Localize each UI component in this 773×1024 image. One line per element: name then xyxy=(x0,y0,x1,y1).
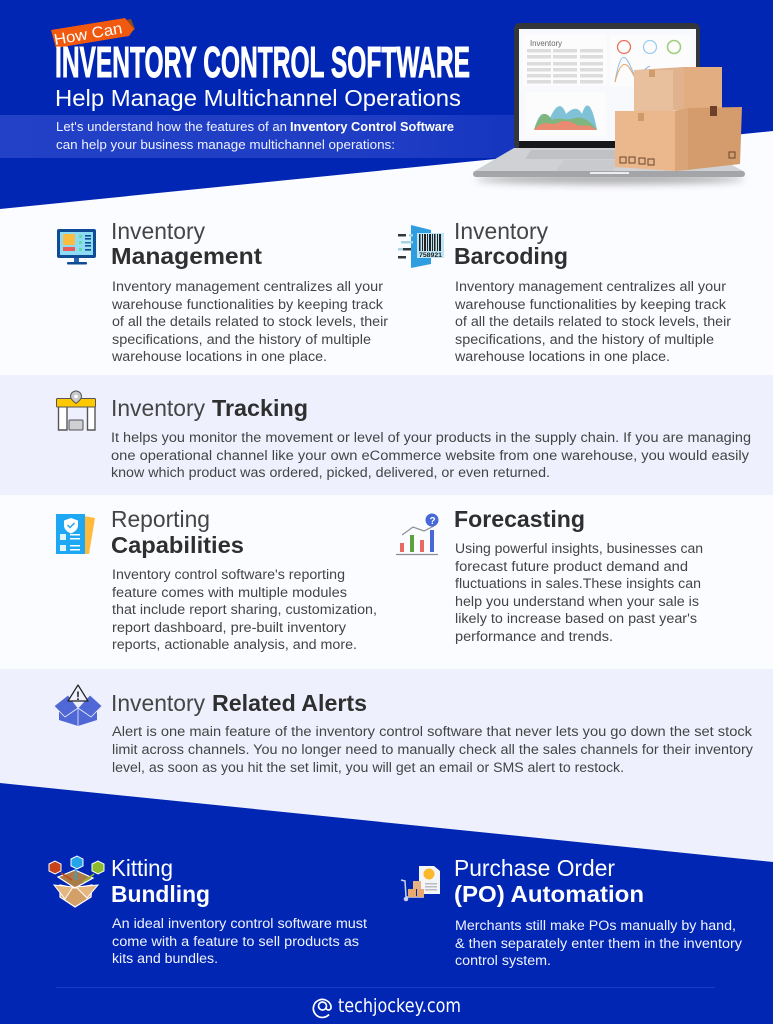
heading: Forecasting xyxy=(454,506,585,532)
website name: techjockey.com xyxy=(338,995,461,1017)
laptop lid xyxy=(514,23,700,150)
panel: inventory related alerts xyxy=(54,685,753,775)
body text: specifications, and the history of multiple xyxy=(455,332,714,347)
icon: open cardboard box with cubes xyxy=(49,856,104,907)
body text: warehouse functionalities by keeping track xyxy=(111,297,383,312)
laptop base xyxy=(473,148,745,172)
laptop hinge xyxy=(519,141,696,148)
heading: Purchase Order xyxy=(454,855,615,881)
body text: Merchants still make POs manually by hand, xyxy=(455,918,736,933)
heading xyxy=(111,690,367,716)
body text: kits and bundles. xyxy=(112,951,218,966)
laptop screen: Inventory xyxy=(530,38,563,48)
body text: level, as soon as you hit the set limit, you will get an email or SMS alert to restock. xyxy=(112,760,624,775)
body text: that include report sharing, customization, xyxy=(112,602,377,617)
light band: tracking xyxy=(0,375,773,495)
body text: control system. xyxy=(455,953,551,968)
body text xyxy=(455,541,703,644)
body text: warehouse locations in one place. xyxy=(454,349,670,364)
laptop screen xyxy=(519,29,696,141)
icon: open box with warning triangle: ! xyxy=(76,689,80,703)
body text: come with a feature to sell products as xyxy=(112,934,359,949)
heading xyxy=(111,218,262,269)
intro text xyxy=(56,120,454,152)
heading: Inventory xyxy=(111,690,205,716)
icon: cart with boxes and invoice xyxy=(401,866,440,901)
panel: inventory tracking xyxy=(56,391,751,480)
body text: of all the details related to stock levels, their xyxy=(112,314,389,329)
icon: barcode scanner tablet: 758921 xyxy=(419,253,443,259)
body text xyxy=(112,724,753,775)
tag: How Can: How Can xyxy=(53,20,124,49)
light band: alerts xyxy=(0,669,773,869)
body text xyxy=(112,567,377,652)
heading: Kitting xyxy=(111,855,173,881)
body text: performance and trends. xyxy=(455,629,613,644)
body text: forecast future product demand and xyxy=(455,559,688,574)
heading xyxy=(111,506,244,558)
heading xyxy=(111,395,308,421)
heading: Inventory xyxy=(111,218,205,244)
panel: forecasting xyxy=(396,506,703,644)
body text: Using powerful insights, businesses can xyxy=(455,541,703,556)
icon: bar chart with question mark: ? xyxy=(430,516,436,527)
footer logo xyxy=(313,995,461,1017)
body text: Alert is one main feature of the inventory control software that never lets you go down the set stock xyxy=(112,724,752,739)
panel: purchase order automation xyxy=(401,855,742,968)
intro text: Let's understand how the features of an xyxy=(56,120,287,134)
intro text: Inventory Control Software xyxy=(290,120,454,134)
heading: Reporting xyxy=(111,506,210,532)
body text: & then separately enter them in the inventory xyxy=(455,936,742,951)
panel: inventory management xyxy=(57,218,389,364)
boxes xyxy=(615,67,742,171)
body text: An ideal inventory control software must xyxy=(112,916,367,931)
body text xyxy=(455,918,742,968)
heading: Inventory xyxy=(454,218,548,244)
icon: report document with shield xyxy=(56,514,95,554)
body text: help you understand when your sale is xyxy=(455,594,699,609)
panel: kitting bundling xyxy=(49,855,367,966)
heading: Management xyxy=(111,243,262,269)
icon: barcode scanner tablet xyxy=(398,225,444,268)
body text xyxy=(111,279,389,364)
subtitle: Help Manage Multichannel Operations xyxy=(55,85,461,111)
body text: know which product was ordered, picked, delivered, or even returned. xyxy=(111,465,550,480)
heading: Tracking xyxy=(212,395,308,421)
heading: Bundling xyxy=(111,881,210,907)
body text: reports, actionable analysis, and more. xyxy=(112,637,357,652)
body text: limit across channels. You no longer need to manually check all the sales channels for their inventory xyxy=(112,742,753,757)
body text: Inventory control software's reporting xyxy=(112,567,345,582)
body text: likely to increase based on past year's xyxy=(455,611,697,626)
body text: fluctuations in sales.These insights can xyxy=(455,576,701,591)
body text xyxy=(454,279,732,364)
body text: one operational channel like your own eCommerce website from one warehouse, you would easily xyxy=(111,448,749,463)
panel: inventory barcoding xyxy=(398,218,732,364)
heading: Related Alerts xyxy=(212,690,367,716)
body text: Inventory management centralizes all your xyxy=(455,279,727,294)
body text xyxy=(112,916,367,966)
heading xyxy=(454,855,644,907)
body text: feature comes with multiple modules xyxy=(112,585,347,600)
icon: techjockey mark xyxy=(313,999,331,1017)
heading xyxy=(454,218,568,269)
body text: warehouse locations in one place. xyxy=(111,349,327,364)
icon: warehouse with location pin xyxy=(56,391,96,430)
laptop shadow xyxy=(476,174,744,184)
illustration: laptop with cardboard boxes xyxy=(473,23,745,184)
body text: It helps you monitor the movement or level of your products in the supply chain. If you are managing xyxy=(111,430,751,445)
body text: Inventory management centralizes all your xyxy=(112,279,384,294)
body text: report dashboard, pre-built inventory xyxy=(112,620,346,635)
panel: reporting capabilities xyxy=(56,506,377,652)
heading xyxy=(111,855,210,907)
icon: open box with warning triangle xyxy=(54,685,102,726)
icon: bar chart with question mark xyxy=(396,514,438,554)
heading: Inventory xyxy=(111,395,205,421)
icon: monitor dashboard xyxy=(57,229,96,264)
footer background xyxy=(0,783,773,1024)
heading: Barcoding xyxy=(454,243,568,269)
heading: (PO) Automation xyxy=(454,881,644,907)
intro text: can help your business manage multichannel operations: xyxy=(56,138,395,152)
body text: of all the details related to stock levels, their xyxy=(455,314,732,329)
body text: warehouse functionalities by keeping track xyxy=(454,297,726,312)
body text: specifications, and the history of multiple xyxy=(112,332,371,347)
intro highlight band xyxy=(0,115,520,158)
body text xyxy=(111,430,751,480)
header background xyxy=(0,0,773,209)
heading: Capabilities xyxy=(111,532,244,558)
